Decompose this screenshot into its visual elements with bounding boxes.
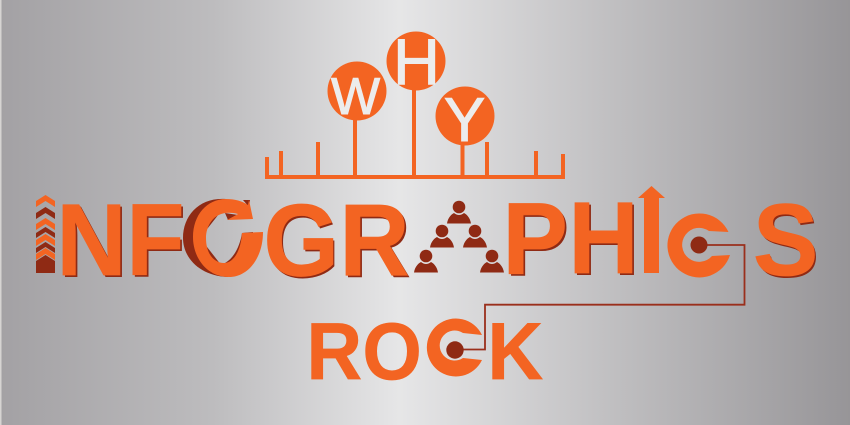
letter H: H bbox=[568, 182, 638, 296]
letter I as chevron stack bbox=[36, 195, 55, 273]
letter N: N bbox=[58, 186, 128, 300]
letter N: N bbox=[56, 184, 126, 298]
letter H balloon bbox=[386, 25, 446, 177]
letters R and O: R bbox=[306, 305, 362, 396]
letter C as target with node bbox=[667, 213, 730, 277]
letter Y balloon bbox=[436, 86, 494, 177]
letter P: P bbox=[504, 184, 570, 298]
connector line between the two C letters bbox=[455, 245, 744, 350]
letter C as target with node bbox=[427, 318, 482, 376]
letter G: G bbox=[265, 186, 340, 300]
letter G: G bbox=[264, 184, 339, 298]
title: INFOGRAPHICS bbox=[36, 182, 820, 300]
letter A as people pyramid bbox=[414, 201, 504, 272]
letter Y balloon: Y bbox=[444, 86, 485, 155]
person icon bottom left bbox=[414, 250, 438, 272]
person icon middle left bbox=[430, 225, 454, 248]
person icon top bbox=[447, 201, 471, 224]
subtitle: ROCK bbox=[306, 305, 543, 397]
letter W balloon bbox=[328, 62, 386, 177]
heading: WHY signpost graphic bbox=[265, 25, 565, 179]
letter O as circular arrow bbox=[183, 199, 263, 277]
letter R: R bbox=[342, 186, 411, 300]
letter I as up arrow bbox=[638, 186, 665, 273]
person icon middle right bbox=[463, 225, 487, 248]
letter F: F bbox=[128, 185, 186, 299]
letter R: R bbox=[340, 184, 409, 298]
letter W balloon: W bbox=[331, 68, 380, 126]
letter H: H bbox=[570, 184, 640, 298]
letter K: K bbox=[488, 305, 543, 396]
letter P: P bbox=[502, 182, 568, 296]
letters R and O: O bbox=[362, 306, 422, 397]
ruler base with ticks bbox=[265, 142, 565, 179]
letter S: S bbox=[754, 185, 820, 299]
letter H balloon: H bbox=[393, 25, 440, 98]
letter S: S bbox=[753, 183, 818, 297]
person icon bottom right bbox=[480, 250, 504, 272]
letters R and O bbox=[306, 305, 422, 397]
letter F: F bbox=[126, 183, 184, 297]
